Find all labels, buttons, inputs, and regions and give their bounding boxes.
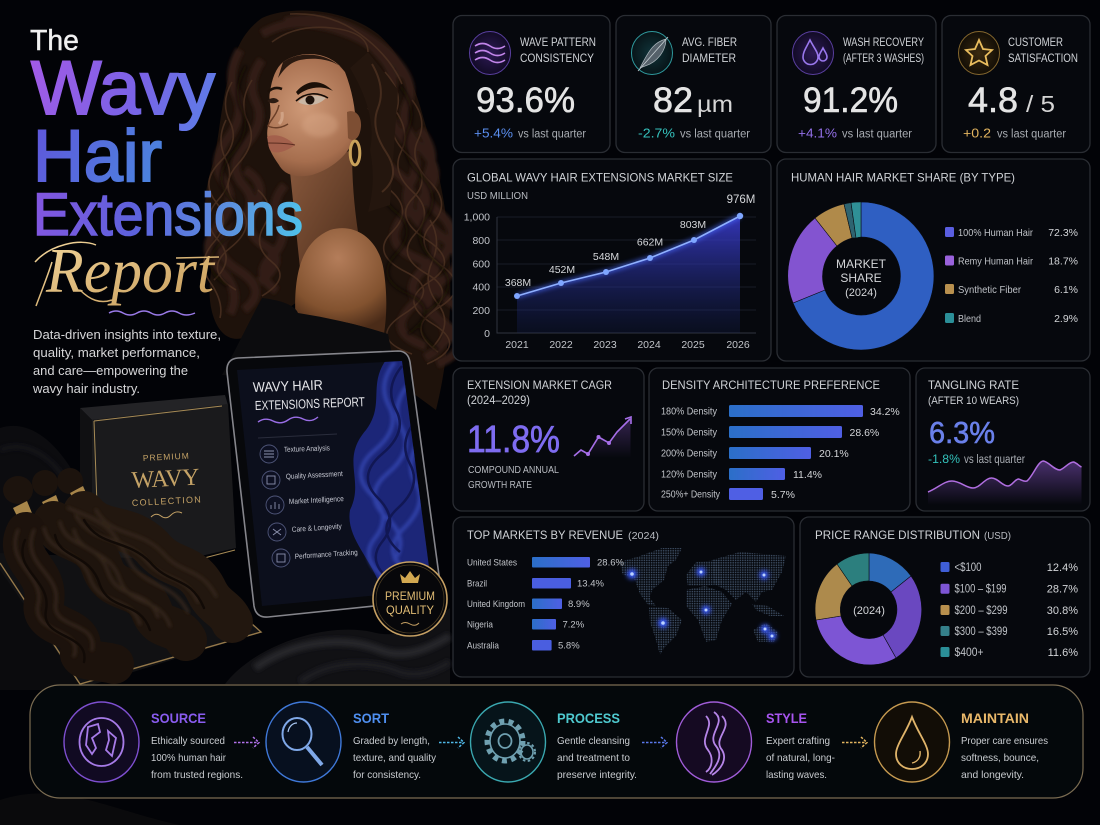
area line chart: 662M xyxy=(637,236,663,248)
KPI card: customer satisfaction: +0.2 xyxy=(963,126,991,140)
step: process: PROCESS xyxy=(557,710,620,726)
KPI card: wash recovery: 91.2% xyxy=(803,81,898,120)
step: process: Gentle cleansing xyxy=(557,735,630,747)
panel: market size line chart: GLOBAL WAVY HAIR EXTENSIONS MARKET SIZE xyxy=(467,170,733,184)
panel: CAGR: 11.8% xyxy=(467,419,560,461)
legend: $400+ xyxy=(954,647,984,659)
legend: 2.9% xyxy=(1054,313,1078,325)
legend: 100% Human Hair xyxy=(958,227,1033,239)
step: source: from trusted regions. xyxy=(151,769,243,781)
panel: CAGR: GROWTH RATE xyxy=(468,480,532,491)
icon: globe xyxy=(80,718,124,766)
KPI card: customer satisfaction: CUSTOMER xyxy=(1008,37,1063,49)
tablet menu items: Market Intelligence xyxy=(289,494,344,506)
step: maintain: Proper care ensures xyxy=(961,735,1048,747)
intro text: wavy hair industry. xyxy=(32,381,140,396)
step: style: STYLE xyxy=(766,710,807,726)
area line chart: 200 xyxy=(472,305,490,317)
legend: Remy Human Hair xyxy=(958,256,1033,268)
area line chart: 976M xyxy=(727,194,755,206)
icon: waves xyxy=(470,32,510,74)
area line chart: 2024 xyxy=(637,339,661,351)
revenue bars: 13.4% xyxy=(577,578,604,590)
area line chart: 803M xyxy=(680,219,706,231)
KPI card: customer satisfaction: / 5 xyxy=(1026,91,1055,117)
step: maintain xyxy=(874,702,1048,782)
legend: 11.6% xyxy=(1048,647,1078,659)
KPI card: customer satisfaction xyxy=(942,16,1090,152)
legend: <$100 xyxy=(954,562,982,574)
revenue bars: 5.8% xyxy=(558,640,580,652)
donut chart: MARKET xyxy=(836,257,887,271)
intro text: Data-driven insights into texture, xyxy=(33,327,221,342)
intro text: and care—empowering the xyxy=(33,363,188,378)
box label: WAVY xyxy=(131,464,200,494)
hair mass xyxy=(205,10,450,410)
panel: tangling rate: 6.3% xyxy=(929,415,995,450)
title line: Wavy: Wavy xyxy=(31,46,215,131)
step: style xyxy=(676,702,835,782)
hair bundles xyxy=(15,508,232,664)
KPI card: fiber diameter: DIAMETER xyxy=(682,53,736,65)
box label: COLLECTION xyxy=(132,494,201,508)
tablet title xyxy=(253,377,365,413)
panel: tangling rate: -1.8% xyxy=(928,452,960,466)
panel: CAGR: EXTENSION MARKET CAGR xyxy=(467,378,612,392)
KPI card: customer satisfaction: SATISFACTION xyxy=(1008,53,1078,65)
panel: CAGR xyxy=(453,368,644,511)
silk fabric background xyxy=(0,426,450,825)
step: maintain: softness, bounce, xyxy=(961,752,1039,764)
area line chart: 400 xyxy=(472,282,490,294)
panel: density bars xyxy=(649,368,910,511)
donut chart xyxy=(788,202,934,350)
facial features xyxy=(267,82,361,165)
KPI card: customer satisfaction: 4.8 xyxy=(968,81,1018,120)
legend: $100 – $199 xyxy=(954,584,1006,596)
tablet menu items xyxy=(260,443,358,567)
area line chart: 2021 xyxy=(505,339,529,351)
legend: 28.7% xyxy=(1047,584,1078,596)
area line chart: 2023 xyxy=(593,339,617,351)
badge: premium quality xyxy=(373,562,447,636)
title line: Extensions: Extensions xyxy=(33,181,303,248)
bar chart: 11.4% xyxy=(793,469,822,481)
panel: top markets: (2024) xyxy=(628,531,659,542)
area line chart: 548M xyxy=(593,251,619,263)
panel: price range: PRICE RANGE DISTRIBUTION xyxy=(815,528,980,542)
revenue bars: 7.2% xyxy=(562,620,585,630)
bar chart: 5.7% xyxy=(771,489,795,501)
revenue bars: Nigeria xyxy=(467,620,494,630)
KPI card: fiber diameter: vs last quarter xyxy=(680,128,750,140)
panel: top markets xyxy=(453,517,794,677)
revenue bars: 8.9% xyxy=(568,599,590,610)
legend: 30.8% xyxy=(1047,605,1078,617)
title xyxy=(30,25,303,315)
step: sort: texture, and quality xyxy=(353,752,437,764)
panel: tangling rate: vs last quarter xyxy=(964,454,1025,466)
woman portrait xyxy=(204,10,463,410)
bundle wefts xyxy=(3,468,83,504)
step: sort: for consistency. xyxy=(353,769,421,781)
intro text xyxy=(32,327,221,396)
panel: human hair market share xyxy=(777,159,1090,361)
panel: market size line chart xyxy=(453,159,771,361)
step: style: Expert crafting xyxy=(766,735,830,747)
KPI card: wash recovery: WASH RECOVERY xyxy=(843,37,924,49)
bar chart: 28.6% xyxy=(850,427,879,439)
panel: CAGR: (2024–2029) xyxy=(467,395,530,407)
panel: process flow xyxy=(30,685,1083,798)
box label: PREMIUM xyxy=(143,451,189,463)
area line chart: 800 xyxy=(472,235,490,247)
step: process: and treatment to xyxy=(557,752,630,764)
step: maintain: and longevity. xyxy=(961,769,1024,781)
title line: Hair: Hair xyxy=(33,116,162,197)
area line chart: 0 xyxy=(484,328,490,340)
legend: $200 – $299 xyxy=(954,605,1008,617)
area line chart: 368M xyxy=(505,277,531,289)
area line chart xyxy=(464,194,756,351)
KPI card: fiber diameter: 82 xyxy=(653,81,693,120)
step: maintain: MAINTAIN xyxy=(961,710,1029,726)
revenue bars: Australia xyxy=(467,640,500,652)
tablet title: EXTENSIONS REPORT xyxy=(255,394,365,413)
KPI card: fiber diameter xyxy=(616,16,771,152)
panel: density bars: DENSITY ARCHITECTURE PREFERENCE xyxy=(662,378,880,392)
arrow: style to maintain xyxy=(842,737,867,748)
legend: 16.5% xyxy=(1047,626,1078,638)
step: source: 100% human hair xyxy=(151,752,226,764)
revenue bars: 28.6% xyxy=(597,558,624,568)
step: source: SOURCE xyxy=(151,710,206,726)
title line: Report: Report xyxy=(45,235,216,306)
arrow: source to sort xyxy=(234,737,259,748)
legend: 18.7% xyxy=(1048,256,1078,268)
legend: 12.4% xyxy=(1047,562,1078,574)
tablet blue hair xyxy=(349,361,429,580)
face xyxy=(267,54,356,176)
panel: market size line chart: USD MILLION xyxy=(467,191,528,202)
legend: Synthetic Fiber xyxy=(958,284,1021,296)
legend: $300 – $399 xyxy=(954,626,1008,638)
title line: The: The xyxy=(30,25,79,57)
KPI card: wave pattern consistency xyxy=(453,16,610,152)
shoulder xyxy=(295,228,386,334)
donut chart xyxy=(815,553,922,665)
icon: crown xyxy=(400,571,420,583)
area line chart: 600 xyxy=(472,258,490,270)
KPI card: wave pattern consistency: +5.4% xyxy=(474,126,513,140)
legend xyxy=(940,562,1078,659)
KPI card: wash recovery: (AFTER 3 WASHES) xyxy=(843,53,924,65)
icon: fiber xyxy=(632,32,672,74)
KPI card: wash recovery xyxy=(777,16,936,152)
bar chart: 200% Density xyxy=(661,448,717,460)
arrow: process to style xyxy=(642,737,667,748)
revenue bars: United States xyxy=(467,558,517,568)
revenue bars: United Kingdom xyxy=(467,599,525,610)
tablet menu items: Quality Assessment xyxy=(286,469,344,481)
donut chart: SHARE xyxy=(840,271,882,285)
bar chart: 250%+ Density xyxy=(661,490,720,500)
bar chart: 120% Density xyxy=(661,470,717,480)
tablet menu items: Care & Longevity xyxy=(292,522,342,534)
panel: tangling rate: (AFTER 10 WEARS) xyxy=(928,395,1019,407)
area line chart: 2026 xyxy=(726,339,750,351)
legend: 72.3% xyxy=(1048,227,1078,239)
intro text: quality, market performance, xyxy=(33,345,200,360)
step: source xyxy=(64,702,243,782)
panel: human hair market share: HUMAN HAIR MARKET SHARE (BY TYPE) xyxy=(791,170,1015,184)
tablet menu items: Texture Analysis xyxy=(284,443,330,454)
step: process xyxy=(470,702,637,782)
legend xyxy=(945,227,1078,325)
donut chart: (2024) xyxy=(845,287,877,299)
revenue bars xyxy=(467,557,624,652)
icon: drop xyxy=(896,717,928,769)
badge: premium quality: QUALITY xyxy=(386,603,434,617)
sparkline arrow xyxy=(574,417,631,458)
revenue bars: Brazil xyxy=(467,578,487,590)
arrow: sort to process xyxy=(439,737,464,748)
tablet xyxy=(227,351,441,617)
icon: magnifier xyxy=(282,718,322,765)
step: sort xyxy=(266,702,437,782)
KPI card: wave pattern consistency: 93.6% xyxy=(476,81,575,120)
KPI card: wave pattern consistency: WAVE PATTERN xyxy=(520,37,596,49)
tablet title: WAVY HAIR xyxy=(253,377,323,395)
world map xyxy=(620,548,786,655)
KPI card: fiber diameter: -2.7% xyxy=(638,126,675,140)
step: style: lasting waves. xyxy=(766,769,827,781)
step: sort: SORT xyxy=(353,710,389,726)
step: process: preserve integrity. xyxy=(557,769,637,781)
KPI card: fiber diameter: AVG. FIBER xyxy=(682,37,737,49)
panel: top markets: TOP MARKETS BY REVENUE xyxy=(467,528,623,542)
neck xyxy=(290,150,358,268)
icon: hair waves xyxy=(705,712,726,775)
panel: CAGR: COMPOUND ANNUAL xyxy=(468,465,559,476)
area line chart: 2025 xyxy=(681,339,705,351)
step: source: Ethically sourced xyxy=(151,735,225,747)
icon: star xyxy=(958,32,1000,74)
badge: premium quality: PREMIUM xyxy=(385,589,435,603)
wave underline xyxy=(109,311,195,315)
area line chart: 1,000 xyxy=(464,212,490,224)
tray with hair bundles xyxy=(0,468,261,688)
bar chart: 180% Density xyxy=(661,406,717,418)
black top xyxy=(222,298,398,385)
bar chart: 20.1% xyxy=(819,448,849,460)
panel: price range xyxy=(800,517,1090,677)
panel: tangling rate xyxy=(916,368,1090,511)
tablet menu items: Performance Tracking xyxy=(295,548,358,561)
KPI card: wave pattern consistency: CONSISTENCY xyxy=(520,53,594,65)
box label xyxy=(131,451,201,518)
area line chart: 2022 xyxy=(549,339,573,351)
KPI card: customer satisfaction: vs last quarter xyxy=(997,128,1066,140)
panel: price range: (USD) xyxy=(984,531,1011,542)
sparkline xyxy=(928,461,1082,505)
step: sort: Graded by length, xyxy=(353,735,430,747)
legend: Blend xyxy=(958,313,981,325)
KPI card: wave pattern consistency: vs last quarter xyxy=(518,128,586,140)
bar chart: 150% Density xyxy=(661,428,717,438)
KPI card: fiber diameter: µm xyxy=(697,91,733,117)
donut chart: (2024) xyxy=(853,605,885,617)
area line chart: 452M xyxy=(549,264,575,276)
step: style: of natural, long- xyxy=(766,752,835,764)
hair strands front xyxy=(350,52,398,212)
icon: drops xyxy=(792,32,834,74)
panel: tangling rate: TANGLING RATE xyxy=(928,378,1019,392)
bar chart xyxy=(661,405,900,501)
icon: gears xyxy=(487,721,535,761)
gift box xyxy=(80,395,236,572)
bar chart: 34.2% xyxy=(870,406,900,418)
legend: 6.1% xyxy=(1054,284,1078,296)
KPI card: wash recovery: +4.1% xyxy=(798,126,837,140)
KPI card: wash recovery: vs last quarter xyxy=(842,128,912,140)
